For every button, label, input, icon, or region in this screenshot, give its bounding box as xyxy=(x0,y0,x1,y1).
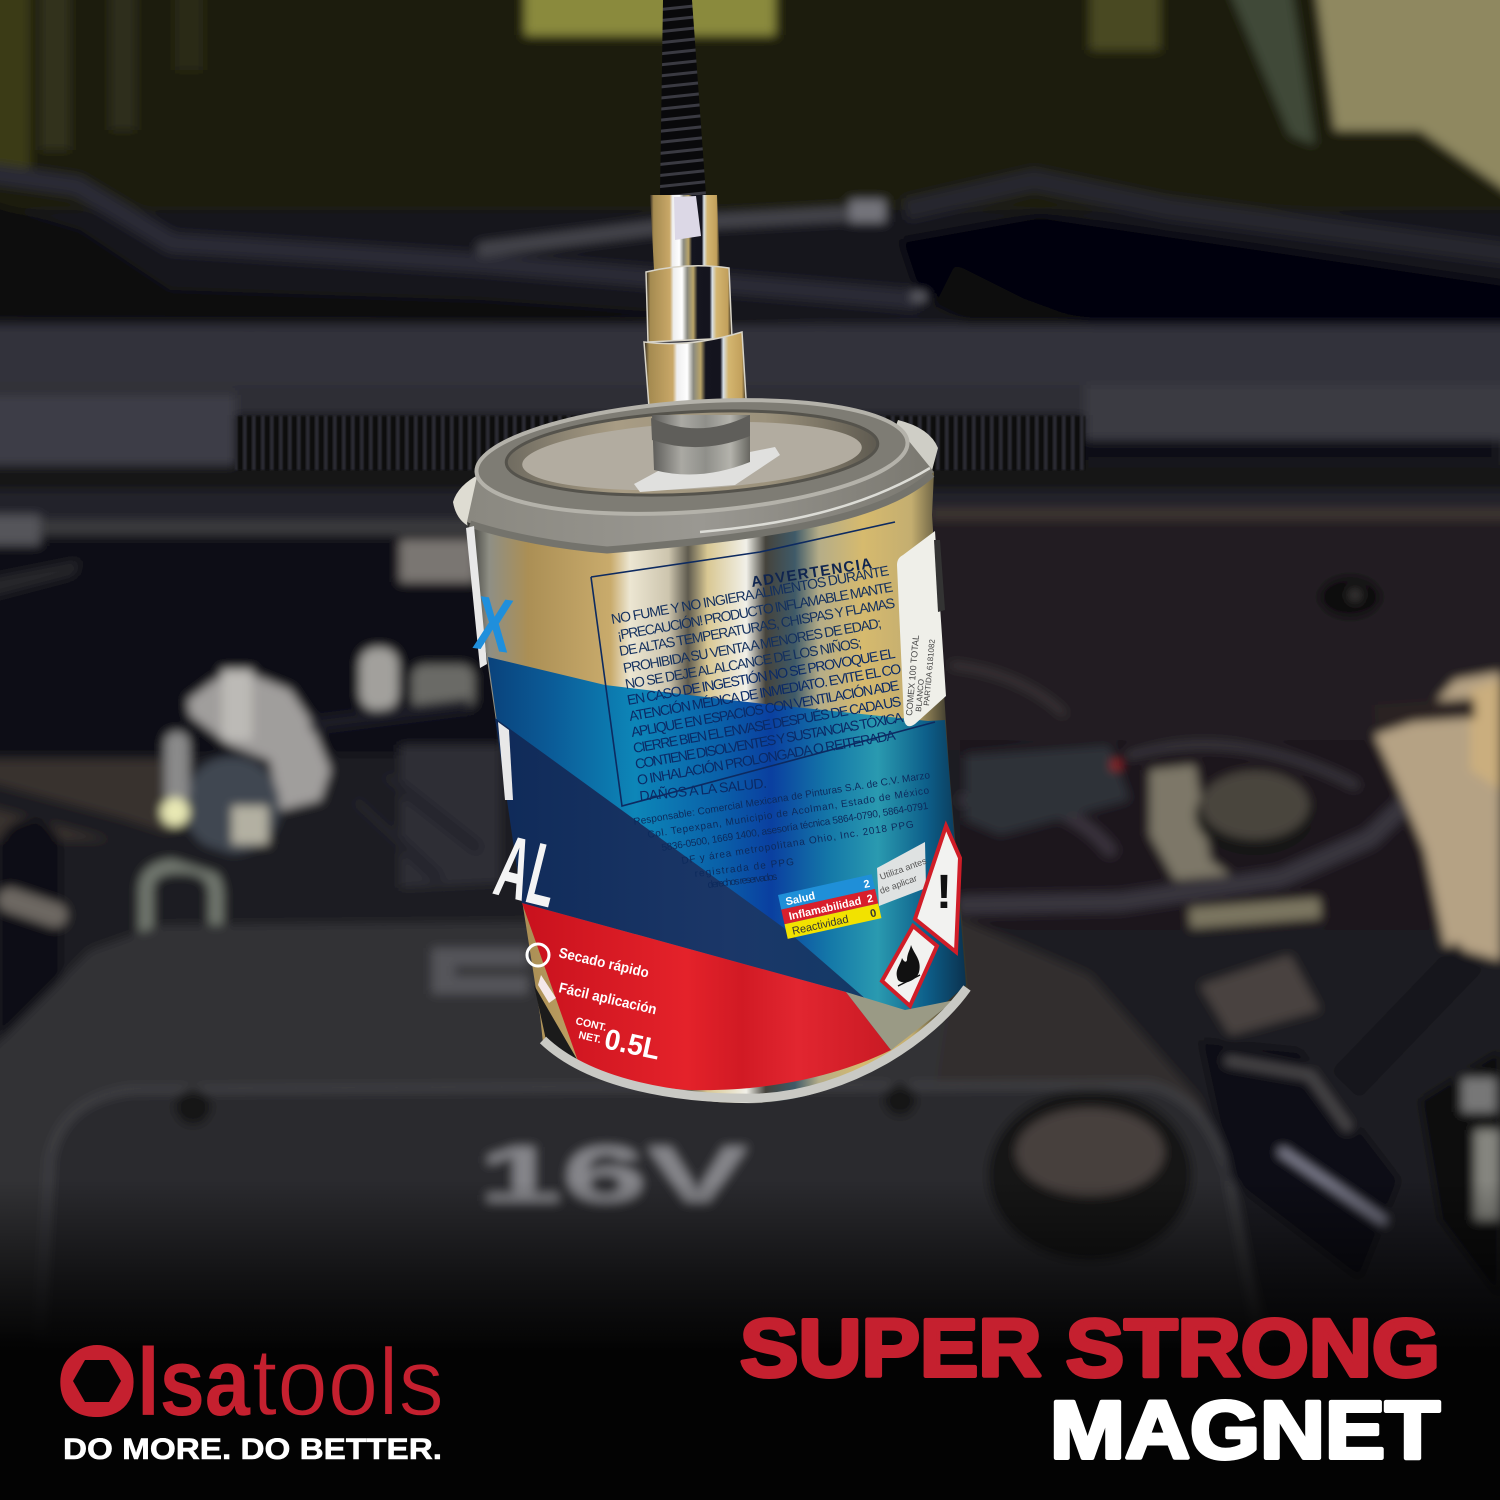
label: blue band xyxy=(488,657,966,1050)
hazard table: 0 xyxy=(869,907,878,920)
collar lower edge xyxy=(470,474,932,550)
warning text: ¡PRECAUCIÓN! PRODUCTO INFLAMABLE MANTE xyxy=(616,579,894,643)
responsible text: 5836-0500, 1669 1400, asesoría técnica 5864-0790, 5864-0791 xyxy=(661,801,930,854)
chrome tip: section 1 xyxy=(650,195,720,270)
warning text: NO SE DEJE AL ALCANCE DE LOS NIÑOS; xyxy=(624,635,863,692)
magnet pick-up tool xyxy=(644,0,747,420)
grille slats xyxy=(235,416,1085,470)
logo xyxy=(56,1328,444,1466)
use-before note xyxy=(877,842,928,906)
collar highlight xyxy=(700,468,930,532)
bottom dark fade xyxy=(0,1180,1500,1350)
white product name fragment: AL xyxy=(487,816,569,926)
logo wordmark: lsa xyxy=(137,1329,251,1436)
use-before note: Utiliza antes xyxy=(878,856,928,882)
warning text: O INHALACIÓN PROLONGADA O REITERADA xyxy=(636,727,897,788)
chrome tip: section 2 xyxy=(646,266,732,342)
product claims on red band: NET. xyxy=(577,1029,602,1046)
can body xyxy=(467,472,968,1103)
hazard table: Salud xyxy=(785,890,816,908)
logo wordmark: tools xyxy=(252,1329,444,1436)
logo wordmark xyxy=(56,1328,444,1437)
hoses xyxy=(0,745,1420,1100)
engine cover xyxy=(0,918,1270,1340)
warning text: APLIQUE EN ESPACIOS CON VENTILACIÓN ADE xyxy=(630,677,900,740)
logo fragment: X: X xyxy=(470,580,517,670)
responsible text: derechos reservados xyxy=(707,872,778,891)
engine parts left xyxy=(146,648,480,935)
barcode sticker: COMEX 100 TOTAL xyxy=(904,635,921,716)
warning text xyxy=(610,562,905,804)
hazard table: 2 xyxy=(866,893,874,906)
bottom rim xyxy=(543,988,967,1098)
warning text: CONTIENE DISOLVENTES Y SUSTANCIAS TÓXICA xyxy=(634,709,905,772)
can left flap xyxy=(453,474,520,527)
hazard pictogram: flame xyxy=(882,926,937,1006)
use-before note: de aplicar xyxy=(878,873,918,896)
collar xyxy=(467,440,934,548)
engine badge: 16V: 16V xyxy=(478,1130,748,1219)
warning text: PROHIBIDA SU VENTA A MENORES DE EDAD; xyxy=(622,615,883,676)
can right flap xyxy=(870,420,938,496)
barcode sticker xyxy=(897,531,946,726)
product claims on red band: 0.5L xyxy=(602,1024,663,1066)
hazard table xyxy=(778,874,881,939)
hazard table: Reactividad xyxy=(791,913,850,938)
parts lower right xyxy=(1200,955,1500,1300)
warning text: NO FUME Y NO INGIERA ALIMENTOS DURANTE xyxy=(610,562,890,627)
icon: brush xyxy=(538,975,556,1003)
warning heading: ADVERTENCIA xyxy=(750,555,873,591)
warning text: DAÑOS A LA SALUD. xyxy=(639,775,768,804)
label: red band xyxy=(522,903,891,1090)
hazard pictogram: exclamation xyxy=(915,826,960,952)
engine parts right xyxy=(965,672,1500,960)
lid outer rim xyxy=(473,387,911,527)
icon: speed badge xyxy=(527,944,549,966)
headline line 1: SUPER STRONG xyxy=(740,1303,1440,1394)
wipers xyxy=(0,172,1500,375)
responsible text: DF y área metropolitana Ohio, Inc. 2018 PPG xyxy=(681,819,915,867)
warning text: ATENCIÓN MÉDICA DE INMEDIATO. EVITE EL CO xyxy=(628,660,902,724)
white patch under magnet xyxy=(634,447,780,492)
chrome lower right xyxy=(846,992,955,1050)
logo wordmark: O xyxy=(56,1328,138,1437)
warning box xyxy=(591,522,935,806)
lid inner panel xyxy=(504,402,880,504)
warning text: DE ALTAS TEMPERATURAS, CHISPAS Y FLAMAS xyxy=(618,595,896,659)
white letter fragment xyxy=(498,722,513,800)
product claims on red band xyxy=(527,944,663,1066)
product claims on red band: Secado rápido xyxy=(557,945,650,982)
paint can xyxy=(453,387,968,1103)
responsible text: Responsable: Comercial Mexicana de Pinturas S.A. de C.V. Marzo xyxy=(633,770,931,828)
magnet base xyxy=(651,415,750,474)
barcode sticker: BLANCO xyxy=(914,679,926,712)
headline xyxy=(740,1303,1440,1476)
white label strip xyxy=(466,526,487,668)
warning text: CIERRE BIEN EL ENVASE DESPUÉS DE CADA US xyxy=(632,693,902,756)
headline line 2: MAGNET xyxy=(1050,1385,1440,1476)
hazard table: 2 xyxy=(863,878,871,891)
bottom black band xyxy=(0,1348,1500,1500)
responsible text: Col. Tepexpan, Municipio de Acolman, Estado de México xyxy=(647,785,930,841)
chrome tip: section 3 xyxy=(644,332,747,420)
cowl panel xyxy=(0,325,1500,536)
logo tagline: DO MORE. DO BETTER. xyxy=(63,1433,442,1466)
dark lower left xyxy=(534,985,578,1061)
flexible shaft xyxy=(660,0,706,195)
label: navy band xyxy=(495,718,890,1020)
warning text: EN CASO DE INGESTIÓN NO SE PROVOQUE EL xyxy=(626,645,897,708)
hazard pictogram: exclamation: ! xyxy=(936,866,952,919)
product claims on red band: Fácil aplicación xyxy=(557,980,658,1018)
windshield xyxy=(0,0,1500,210)
hazard table: Inflamabilidad xyxy=(788,895,863,923)
lid sand centre xyxy=(521,414,863,498)
upper bay xyxy=(0,515,1500,945)
product claims on red band: CONT. xyxy=(574,1015,608,1034)
responsible text xyxy=(633,770,931,891)
barcode sticker: PARTIDA 6181082 xyxy=(922,638,937,706)
responsible text: registrada de PPG xyxy=(694,857,795,880)
